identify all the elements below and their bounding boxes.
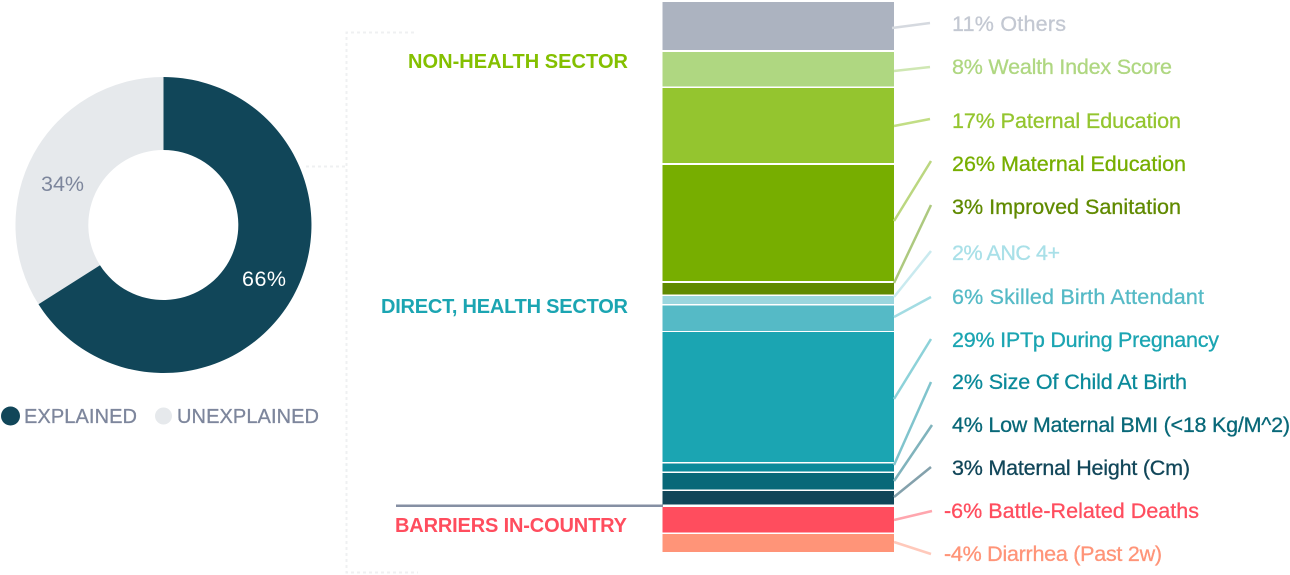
label: battle-related deaths: -6% Battle-Related Deaths <box>944 499 1199 523</box>
value labels <box>944 12 1290 566</box>
segment: IPTp during pregnancy <box>662 332 894 462</box>
heading: direct, health sector: DIRECT, HEALTH SECTOR <box>381 296 629 318</box>
label: diarrhea: -4% Diarrhea (Past 2w) <box>944 542 1162 566</box>
segment: maternal education <box>662 165 894 281</box>
segment: size of child at birth <box>662 464 894 472</box>
stacked bar <box>662 2 894 552</box>
heading: non-health sector: NON-HEALTH SECTOR <box>408 51 629 73</box>
label: paternal education: 17% Paternal Education <box>952 109 1181 133</box>
donut label: 66%: 66% <box>242 267 286 291</box>
segment: battle-related deaths <box>662 507 894 532</box>
donut slice: explained 66% <box>38 77 311 373</box>
label: maternal education: 26% Maternal Education <box>952 152 1186 176</box>
donut label: 34%: 34% <box>41 172 84 196</box>
legend <box>1 406 319 428</box>
donut slice: unexplained 34% <box>15 77 163 304</box>
segment: others <box>662 2 894 50</box>
segment: ANC 4+ <box>662 296 894 304</box>
heading: barriers in-country: BARRIERS IN-COUNTRY <box>395 515 628 537</box>
label: skilled birth attendant: 6% Skilled Birth Attendant <box>952 285 1204 309</box>
segment: low maternal BMI <box>662 473 894 490</box>
label: maternal height: 3% Maternal Height (Cm) <box>952 456 1190 480</box>
label: low maternal BMI: 4% Low Maternal BMI (<18 Kg/M^2) <box>952 413 1290 437</box>
donut chart <box>15 77 311 373</box>
label: size of child at birth: 2% Size Of Child At Birth <box>952 370 1187 394</box>
segment: wealth index score <box>662 52 894 86</box>
label: others: 11% Others <box>952 12 1066 36</box>
legend item: explained: EXPLAINED <box>24 406 137 428</box>
label: wealth index score: 8% Wealth Index Score <box>952 55 1172 79</box>
label: IPTp during pregnancy: 29% IPTp During Pregnancy <box>952 328 1219 352</box>
segment: diarrhea <box>662 534 894 552</box>
segment: maternal height <box>662 491 894 504</box>
segment: paternal education <box>662 88 894 163</box>
leader lines <box>892 23 932 554</box>
label: improved sanitation: 3% Improved Sanitation <box>952 195 1181 219</box>
legend item: unexplained: UNEXPLAINED <box>177 406 319 428</box>
segment: improved sanitation <box>662 283 894 294</box>
segment: skilled birth attendant <box>662 306 894 331</box>
dotted bracket connector <box>306 32 418 572</box>
label: ANC 4+: 2% ANC 4+ <box>952 241 1060 265</box>
baseline rule <box>396 504 663 507</box>
